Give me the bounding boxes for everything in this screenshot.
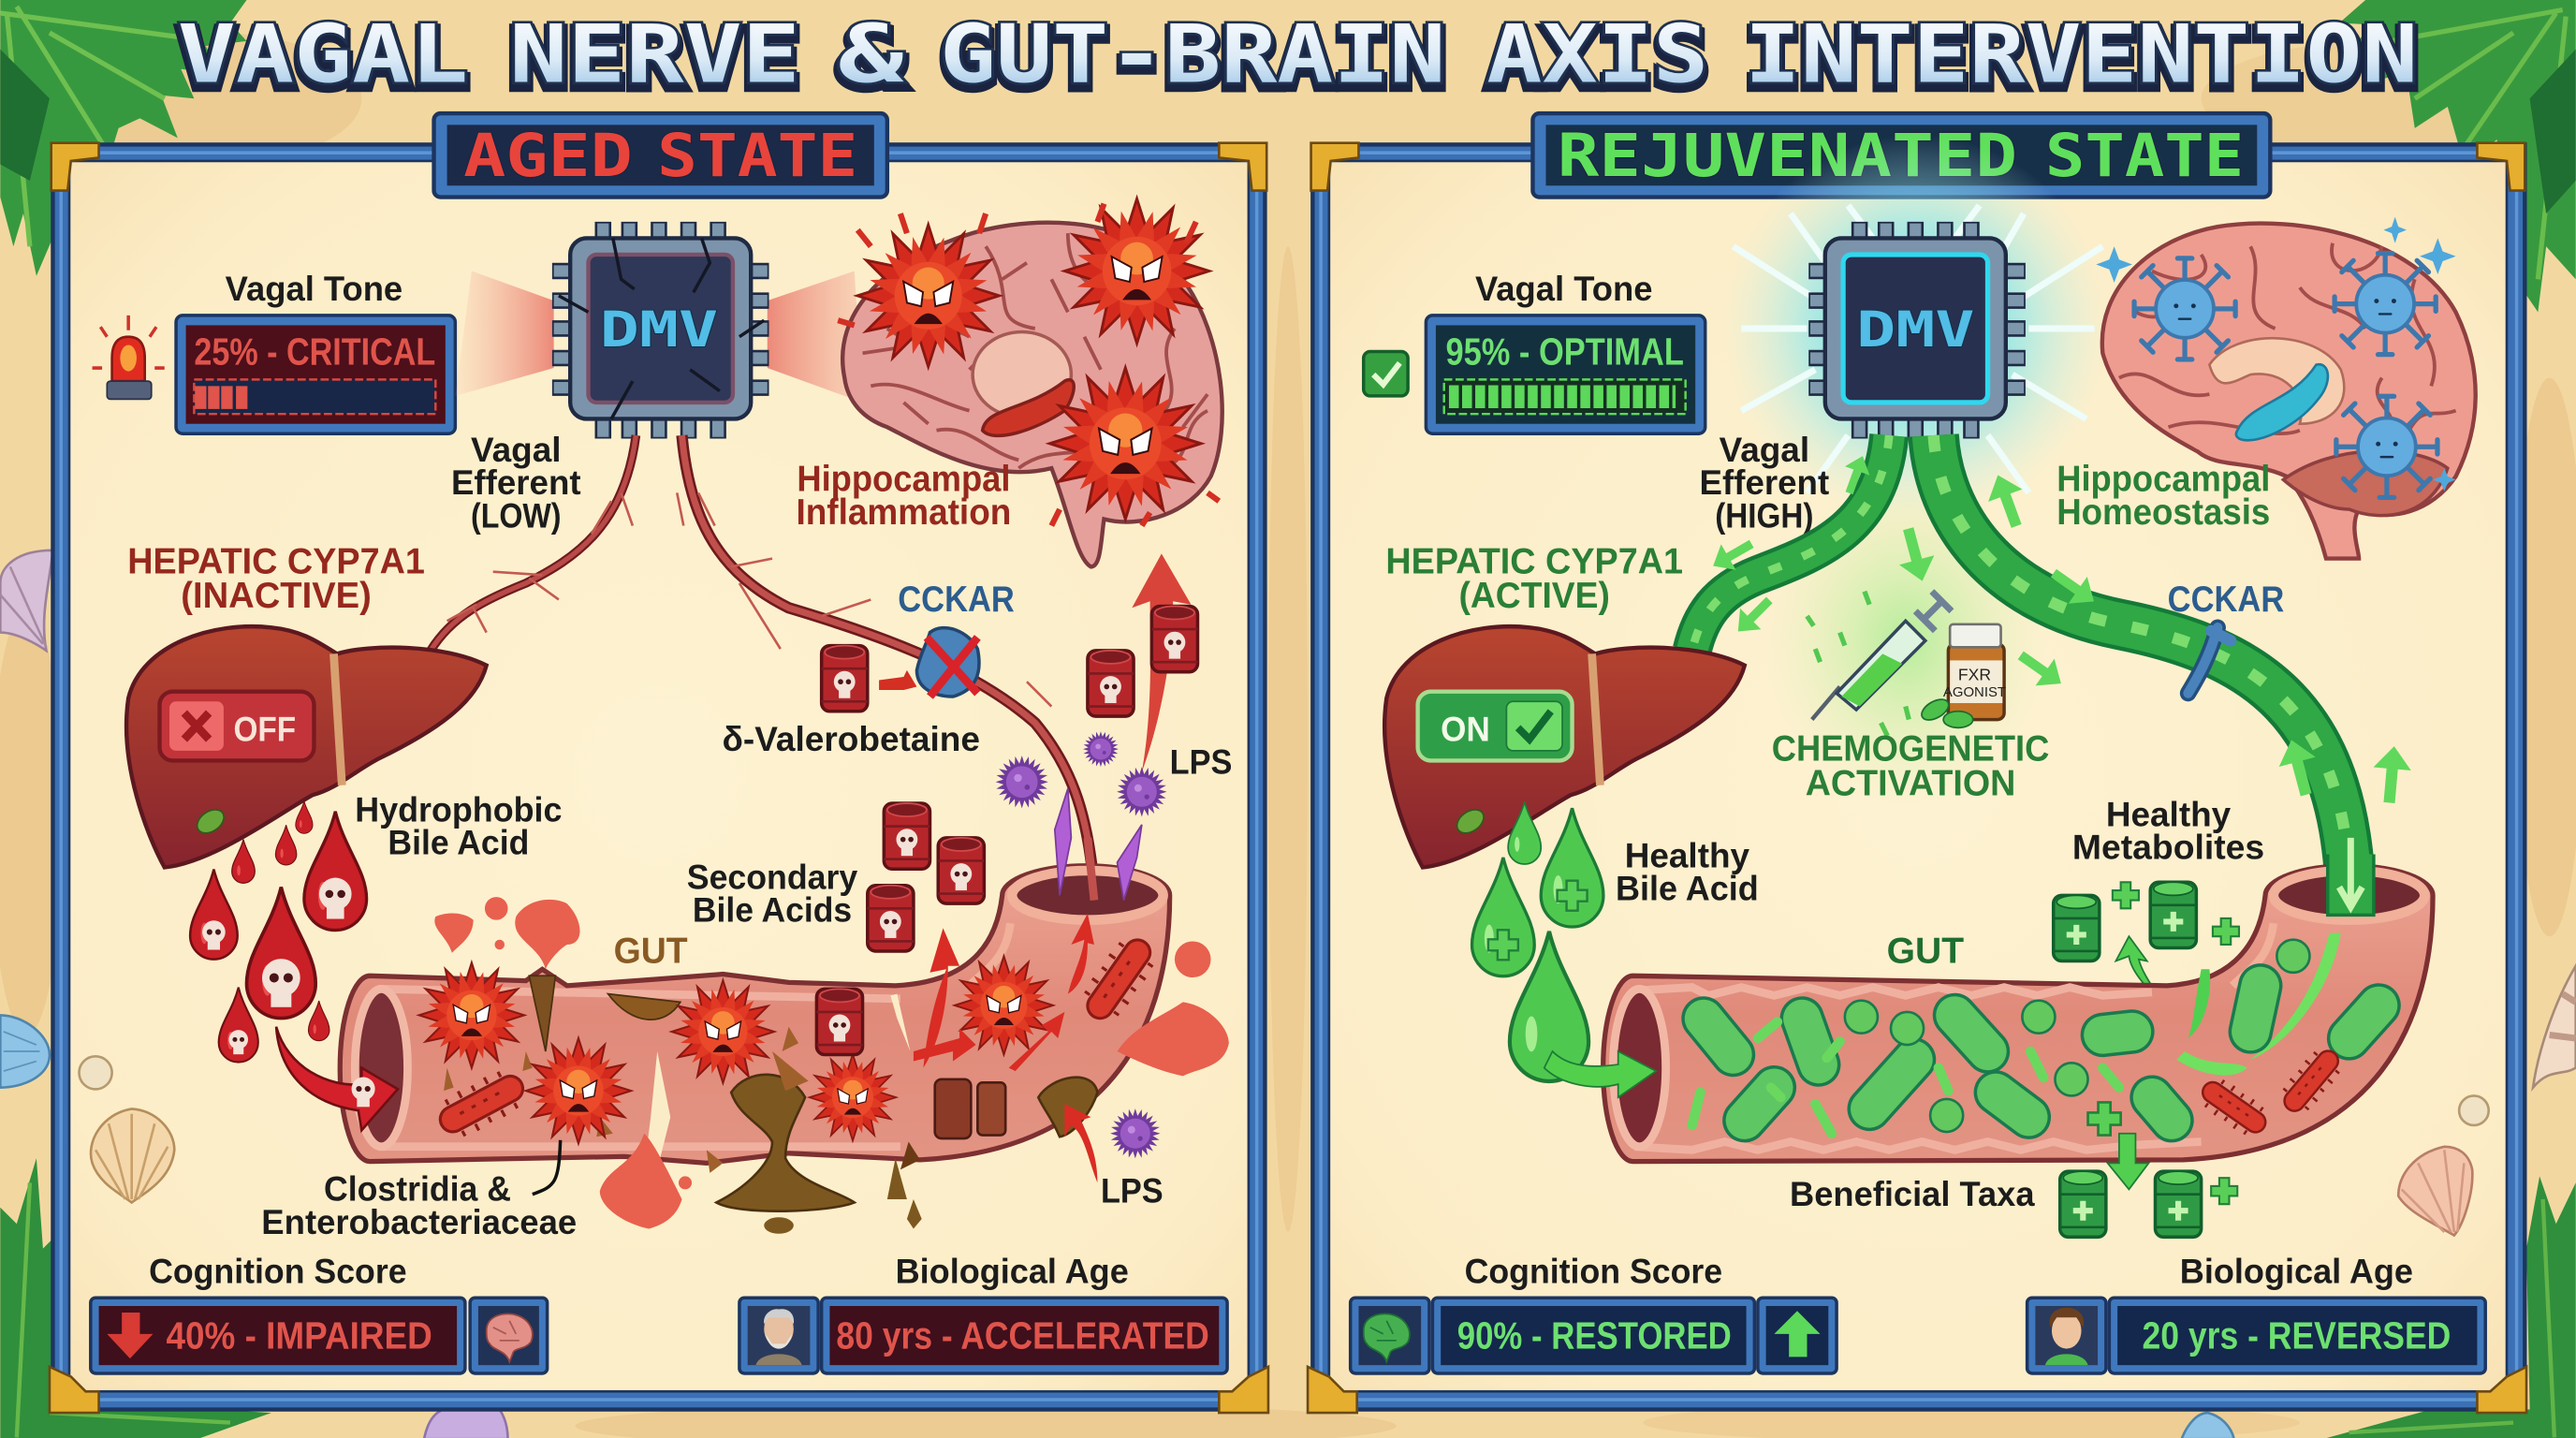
cognition score: aged	[91, 1252, 548, 1373]
chemogenetic glow	[1766, 477, 2045, 805]
biological age: rejuvenated: Biological Age	[2180, 1252, 2413, 1290]
vagal tone meter: 25% - CRITICAL	[194, 330, 435, 374]
hepatic CYP7A1 active label: HEPATIC CYP7A1	[1385, 541, 1683, 581]
healthy metabolites label	[2072, 796, 2264, 867]
hepatic CYP7A1 inactive label: HEPATIC CYP7A1	[127, 541, 425, 581]
title: GUT-BRAIN	[940, 8, 1445, 102]
chemogenetic activation label: CHEMOGENETIC	[1772, 728, 2049, 769]
CCKAR cuff	[2188, 627, 2231, 693]
DMV chip: damaged	[552, 222, 769, 439]
clostridia label: Clostridia &	[324, 1170, 511, 1209]
toxic barrels: secondary bile acids	[868, 803, 984, 951]
LPS particle: lower	[1105, 1103, 1165, 1164]
delta-valerobetaine label: δ-Valerobetaine	[722, 720, 980, 758]
blocked CCKAR receptor	[916, 628, 979, 697]
healthy gut	[1603, 838, 2433, 1162]
title: &	[838, 8, 904, 102]
title: &	[838, 13, 904, 107]
title: VAGAL	[178, 13, 468, 107]
panel: rejuvenated state	[1308, 113, 2526, 1413]
vagal efferent label: high: Efferent	[1700, 463, 1829, 502]
vagal efferent label: high	[1700, 431, 1829, 535]
panel: aged state	[50, 113, 1268, 1413]
healthy bile acid label: Bile Acid	[1616, 870, 1759, 908]
cognition score: aged: Cognition Score	[149, 1252, 407, 1290]
degraded vagal nerve to liver	[431, 435, 636, 651]
cognition score: aged: 40% - IMPAIRED	[167, 1314, 432, 1357]
vagal tone meter	[1426, 315, 1705, 433]
secondary bile acids label	[687, 858, 858, 929]
healthy vagal nerve to liver	[1692, 435, 1889, 651]
cognition score: rejuvenated	[1351, 1252, 1837, 1373]
secondary bile acids label: Secondary	[687, 858, 858, 896]
gut bacteria and toxins: aged	[417, 914, 1156, 1182]
scallop shell	[2398, 1147, 2472, 1236]
shell: left blue	[0, 1015, 50, 1088]
DMV chip: healthy	[1808, 222, 2026, 439]
panel frame	[1308, 143, 2526, 1413]
title: AXIS	[1486, 13, 1708, 107]
panel heading: rejuvenated state	[1532, 113, 2270, 198]
hepatic CYP7A1 active label: (ACTIVE)	[1458, 576, 1610, 616]
clostridia label: Enterobacteriaceae	[261, 1203, 577, 1241]
hippocampal homeostasis label: Homeostasis	[2056, 492, 2270, 533]
toxic barrels rising to brain	[1088, 553, 1197, 772]
gut label: aged: GUT	[614, 931, 688, 971]
hippocampal homeostasis label	[2056, 460, 2270, 533]
vagal efferent label: high: Vagal	[1720, 431, 1809, 469]
shell: bottom blue	[2182, 1413, 2234, 1438]
remaining pathogens	[2203, 1049, 2342, 1137]
green barrels: metabolites	[2054, 882, 2239, 1002]
panel heading: rejuvenated state: REJUVENATED	[1558, 121, 2017, 190]
title	[178, 8, 2418, 107]
vagal tone label: Vagal Tone	[1475, 270, 1653, 308]
LPS label: lower: LPS	[1101, 1171, 1164, 1210]
plus sign and arrow in gut	[2088, 1102, 2148, 1189]
title: NERVE	[509, 13, 800, 107]
biological age: rejuvenated: 20 yrs - REVERSED	[2142, 1314, 2451, 1357]
toggle: on	[1418, 692, 1573, 760]
healthy brain	[2096, 217, 2476, 559]
title: VAGAL	[178, 8, 468, 102]
vagal efferent label: low	[451, 431, 581, 535]
CCKAR label: CCKAR	[898, 580, 1015, 620]
brain with inflammation	[838, 196, 1222, 566]
palm leaf: bottom left	[0, 1158, 271, 1438]
vagal efferent label: low: Vagal	[471, 431, 562, 469]
signal cones from DMV	[455, 271, 863, 403]
clostridia label	[261, 1170, 577, 1241]
DMV chip: damaged: DMV	[600, 301, 718, 359]
vagal efferent label: low: (LOW)	[471, 496, 562, 535]
LPS particles	[989, 727, 1172, 822]
title: INTERVENTION	[1745, 13, 2418, 107]
healthy vagal nerve to gut	[1934, 435, 2350, 917]
vagal tone label: Vagal Tone	[226, 270, 402, 308]
hippocampal inflammation label: Hippocampal	[797, 460, 1010, 500]
panel heading: rejuvenated state: STATE	[2045, 121, 2244, 190]
hepatic CYP7A1 active label	[1385, 541, 1683, 616]
FXR agonist bottle: FXR	[1958, 665, 1991, 683]
nerve entering gut with purple leak arrows	[1055, 788, 1142, 901]
toggle: off	[160, 692, 314, 760]
toxic bile arrow into gut	[276, 1027, 398, 1130]
pebble	[80, 1056, 112, 1089]
palm leaf: top right	[2339, 0, 2576, 312]
liver: active	[1384, 626, 1745, 867]
healthy bile acid label: Healthy	[1625, 836, 1750, 874]
vagal tone meter	[176, 315, 455, 433]
red smoke leaks	[434, 897, 1229, 1229]
chemogenetic activation label: ACTIVATION	[1806, 763, 2015, 803]
CCKAR label: CCKAR	[2168, 580, 2284, 620]
chemogenetic activation label	[1772, 728, 2049, 803]
vagal efferent label: high: (HIGH)	[1715, 496, 1814, 535]
shell: right pink	[2533, 966, 2576, 1088]
hepatic CYP7A1 inactive label: (INACTIVE)	[181, 576, 372, 616]
healthy bile drops	[1472, 801, 1603, 976]
hydrophobic bile acid label: Hydrophobic	[355, 790, 562, 829]
leaky gut	[340, 866, 1170, 1234]
toggle: off: OFF	[233, 710, 296, 748]
panel frame	[50, 143, 1268, 1413]
title: GUT-BRAIN	[940, 13, 1445, 107]
big drop and arrow into gut	[1510, 932, 1656, 1097]
icon: check badge	[1364, 352, 1408, 396]
shell: left purple	[0, 550, 52, 651]
toxic barrel and arrow: delta-valerobetaine	[822, 646, 916, 712]
hippocampal inflammation label: Inflammation	[796, 492, 1011, 533]
pebble	[2459, 1095, 2489, 1125]
healthy metabolites label: Metabolites	[2072, 829, 2264, 867]
DMV chip: healthy: DMV	[1856, 301, 1974, 359]
gut bacteria: healthy	[1692, 940, 2378, 1134]
hydrophobic bile acid label: Bile Acid	[388, 823, 529, 861]
hippocampal homeostasis label: Hippocampal	[2056, 460, 2270, 500]
biological age: aged: Biological Age	[896, 1252, 1129, 1290]
green barrels: beneficial taxa	[2060, 1171, 2237, 1237]
FXR agonist bottle	[1918, 624, 2006, 727]
cognition score: rejuvenated: 90% - RESTORED	[1457, 1314, 1732, 1357]
palm leaf: top left	[0, 0, 247, 276]
callout line: bacteria	[533, 1140, 561, 1195]
panel heading: aged state: AGED	[463, 121, 633, 190]
panel heading: aged state: STATE	[657, 121, 857, 190]
hepatic CYP7A1 inactive label	[127, 541, 425, 616]
panel heading: aged state	[434, 113, 887, 198]
FXR agonist bottle: AGONIST	[1943, 685, 2006, 700]
title: AXIS	[1486, 8, 1708, 102]
title: INTERVENTION	[1745, 8, 2418, 102]
gut label: healthy: GUT	[1887, 931, 1964, 971]
scallop shell	[91, 1108, 174, 1202]
beneficial taxa label: Beneficial Taxa	[1790, 1175, 2035, 1213]
vagal efferent label: low: Efferent	[451, 463, 581, 502]
shell: bottom purple	[424, 1410, 508, 1438]
vagal tone meter: 95% - OPTIMAL	[1445, 330, 1684, 374]
liver: inactive	[126, 626, 487, 867]
degraded vagal nerve to gut	[677, 435, 1094, 888]
icon: alarm siren	[93, 315, 165, 399]
biological age: aged: 80 yrs - ACCELERATED	[836, 1314, 1209, 1357]
DMV glow and rays	[1721, 135, 2109, 522]
biological age: aged	[739, 1252, 1227, 1373]
secondary bile acids label: Bile Acids	[693, 890, 852, 929]
title: NERVE	[509, 8, 800, 102]
cognition score: rejuvenated: Cognition Score	[1465, 1252, 1722, 1290]
biological age: rejuvenated	[2027, 1252, 2485, 1373]
healthy bile acid label	[1616, 836, 1759, 908]
hippocampal inflammation label	[796, 460, 1011, 533]
hydrophobic bile acid label	[355, 790, 562, 861]
flow arrows	[1705, 451, 2413, 804]
toggle: on: ON	[1441, 710, 1490, 748]
palm leaf: bottom right	[2322, 1176, 2576, 1438]
syringe	[1807, 592, 1952, 736]
toxic bile drops	[190, 801, 367, 1063]
LPS label: upper: LPS	[1170, 742, 1232, 781]
healthy metabolites label: Healthy	[2106, 796, 2232, 834]
